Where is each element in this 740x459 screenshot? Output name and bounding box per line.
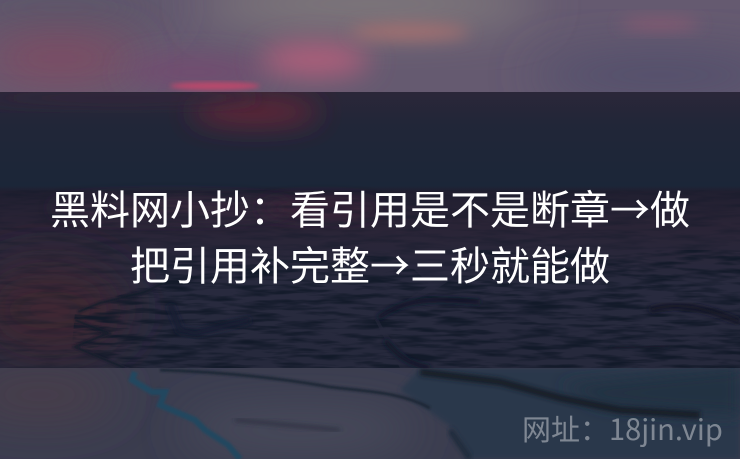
title line 2: 把引用补完整→三秒就能做 — [130, 234, 610, 292]
title line 1: 黑料网小抄：看引用是不是断章→做 — [50, 178, 690, 236]
watermark: 网址：18jin.vip — [522, 407, 723, 449]
sky band — [0, 0, 740, 97]
dark middle band: sea and wet sand — [0, 92, 740, 370]
lower band: lighter sand and foam — [0, 368, 740, 459]
